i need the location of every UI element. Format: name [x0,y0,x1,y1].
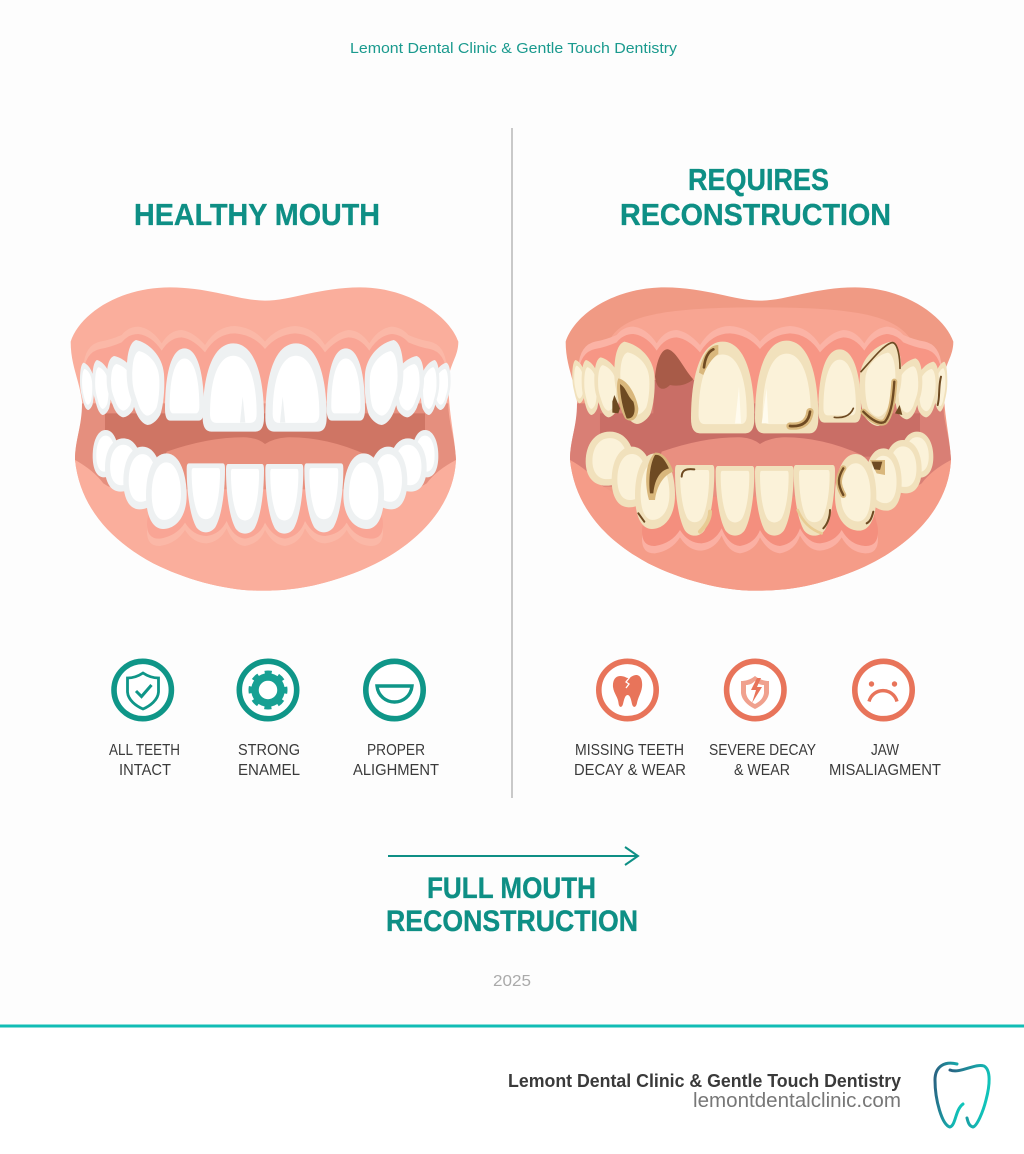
lower teeth [586,432,933,536]
icon: strong enamel [239,661,297,719]
label: proper alignment [353,742,439,779]
tooth decay stains [612,343,941,533]
label: all teeth intact: INTACT [119,762,171,779]
label: all teeth intact [109,742,180,779]
illustration: damaged mouth [566,287,953,591]
heading: requires reconstruction: RECONSTRUCTION [620,197,891,232]
icon: missing teeth [599,661,656,719]
year: 2025 [493,973,531,990]
icon: jaw misalignment [855,661,912,719]
heading: full mouth reconstruction [386,872,638,938]
lower teeth [93,430,438,534]
arrow [388,847,638,865]
label: strong enamel: ENAMEL [238,762,300,779]
label: missing teeth: MISSING TEETH [575,742,684,759]
footer clinic text: Lemont Dental Clinic & Gentle Touch Dentistry [508,1071,901,1091]
label: severe decay: SEVERE DECAY [709,742,816,759]
missing tooth socket [655,349,693,389]
label: jaw misalignment [829,742,941,779]
label: jaw misalignment: JAW [871,742,899,759]
label: missing teeth: DECAY & WEAR [574,762,686,779]
label: severe decay [709,742,816,779]
heading: full mouth reconstruction: FULL MOUTH [427,872,596,905]
heading: full mouth reconstruction: RECONSTRUCTION [386,905,638,938]
label: all teeth intact: ALL TEETH [109,742,180,759]
heading: requires reconstruction: REQUIRES [688,162,829,197]
heading: requires reconstruction [620,162,891,232]
clinic name header: Lemont Dental Clinic & Gentle Touch Dentistry [350,40,678,57]
label: strong enamel [238,742,300,779]
label: missing teeth [574,742,686,779]
label: proper alignment: ALIGHMENT [353,762,439,779]
illustration: healthy mouth [71,287,458,591]
icon: all teeth intact [114,661,171,719]
label: strong enamel: STRONG [238,742,300,759]
footer band [0,1024,1024,1154]
icon: severe decay [727,661,784,719]
upper teeth [572,341,947,433]
heading: healthy mouth: HEALTHY MOUTH [134,197,380,232]
label: jaw misalignment: MISALIAGMENT [829,762,941,779]
label: proper alignment: PROPER [367,742,425,759]
footer clinic text [508,1071,901,1112]
logo: tooth [935,1063,989,1127]
label: severe decay: & WEAR [734,762,790,779]
footer clinic text: lemontdentalclinic.com [693,1090,901,1112]
icon: proper alignment [366,661,423,719]
upper teeth [80,340,451,432]
